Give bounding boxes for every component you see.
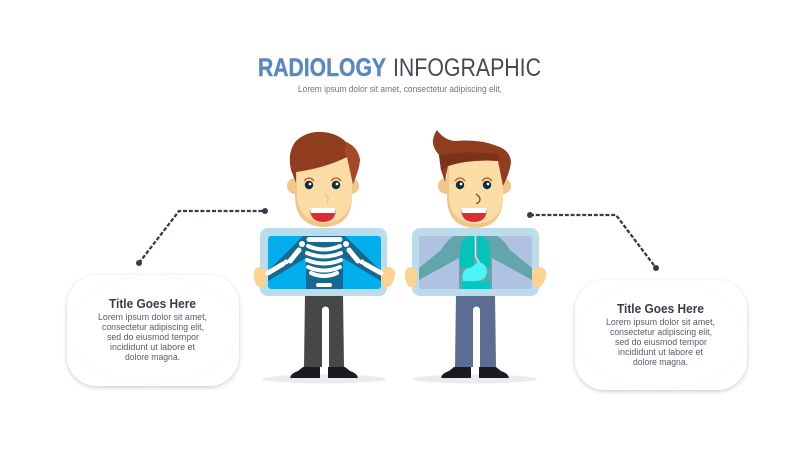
x-ray panel bbox=[260, 228, 387, 296]
right card body text: incididunt ut labore et bbox=[618, 347, 703, 357]
eyes bbox=[456, 181, 464, 189]
left card body text: sed do eiusmod tempor bbox=[107, 332, 199, 342]
left card title: Title Goes Here bbox=[109, 297, 196, 311]
panel: right callout card bbox=[575, 280, 747, 390]
ground shadow bbox=[413, 374, 537, 384]
stomach and intestines bbox=[462, 262, 487, 281]
hands bbox=[254, 267, 266, 287]
left card body text: incididunt ut labore et bbox=[110, 342, 195, 352]
right card title: Title Goes Here bbox=[617, 302, 704, 316]
title: RADIOLOGY bbox=[258, 54, 386, 82]
lungs bbox=[460, 236, 490, 267]
head bbox=[287, 132, 360, 227]
hands bbox=[405, 267, 417, 287]
torso and arms silhouette bbox=[419, 236, 532, 289]
left card body text: Lorem ipsum dolor sit amet, bbox=[98, 312, 207, 322]
head bbox=[433, 130, 511, 228]
left card body text bbox=[98, 312, 207, 362]
mouth bbox=[310, 208, 336, 222]
right card body text: Lorem ipsum dolor sit amet, bbox=[606, 317, 715, 327]
right card body text: consectetur adipiscing elit, bbox=[610, 327, 712, 337]
panel: left callout card bbox=[67, 275, 239, 386]
right card body text bbox=[606, 317, 715, 367]
subtitle: Lorem ipsum dolor sit amet, consectetur adipiscing elit, bbox=[298, 84, 502, 94]
left card body text: consectetur adipiscing elit, bbox=[102, 322, 204, 332]
trousers bbox=[455, 294, 496, 367]
left card body text: dolore magna. bbox=[125, 352, 180, 362]
ground shadow bbox=[262, 374, 386, 384]
nose bbox=[476, 194, 480, 203]
x-ray panel bbox=[412, 228, 539, 296]
mouth bbox=[461, 208, 487, 222]
connector: left callout bbox=[136, 208, 268, 266]
trousers bbox=[304, 294, 344, 367]
title: INFOGRAPHIC bbox=[393, 54, 541, 82]
hair bbox=[290, 132, 360, 184]
title bbox=[258, 54, 541, 82]
hair bbox=[433, 130, 511, 186]
shoes bbox=[441, 367, 509, 378]
esophagus bbox=[476, 236, 480, 263]
shoulder joints bbox=[284, 241, 364, 264]
right card body text: dolore magna. bbox=[633, 357, 688, 367]
connector: right callout bbox=[527, 212, 659, 271]
figure: man with organ x-ray bbox=[405, 130, 546, 384]
shoes bbox=[290, 367, 358, 378]
figure: man with skeleton x-ray bbox=[254, 132, 395, 384]
eyes bbox=[305, 181, 313, 189]
skeleton bbox=[268, 240, 381, 285]
right card body text: sed do eiusmod tempor bbox=[615, 337, 707, 347]
nose bbox=[325, 194, 328, 203]
torso and arms silhouette bbox=[268, 236, 381, 289]
